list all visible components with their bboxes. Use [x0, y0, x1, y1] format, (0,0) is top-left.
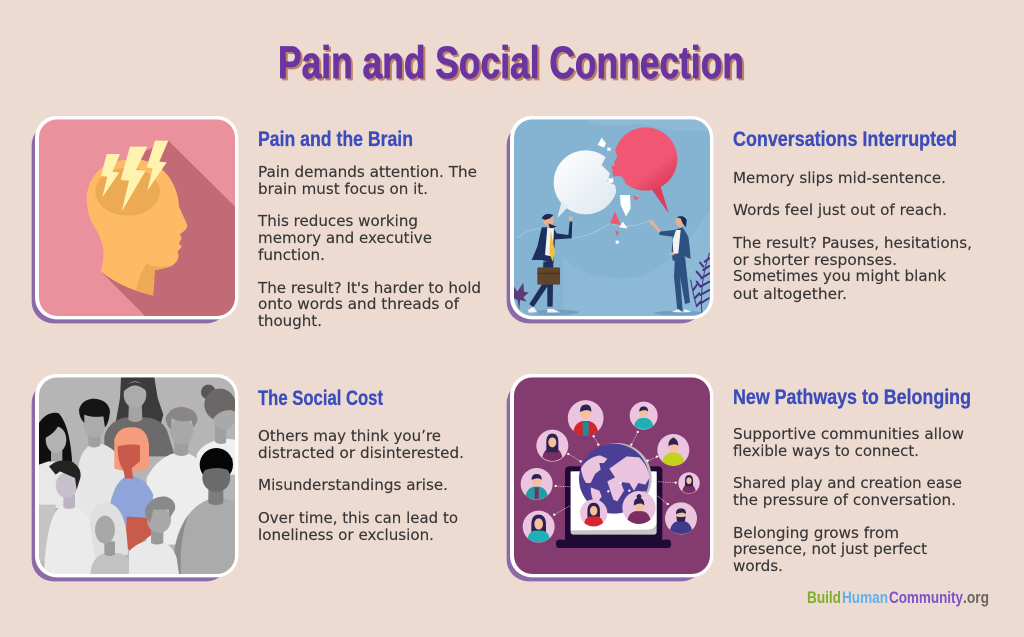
text block: pain and the brain: memory and executive	[258, 229, 432, 247]
icon: head silhouette	[87, 159, 187, 296]
text block: pain and the brain: The result? It's harder to hold	[257, 279, 481, 297]
text block: new pathways to belonging: the pressure of conversation.	[733, 491, 956, 509]
icon: people avatars	[521, 400, 700, 543]
text block: conversations interrupted: Conversations Interrupted	[733, 128, 957, 151]
text block: conversations interrupted: The result? Pauses, hesitations,	[732, 234, 972, 252]
panel: conversations interrupted illustration	[507, 116, 713, 323]
title: Pain and Social Connection	[280, 39, 746, 90]
text block: conversations interrupted	[732, 128, 972, 303]
panel: new pathways illustration	[507, 374, 713, 581]
footer logo: BuildHumanCommunity.org: .org	[963, 588, 989, 607]
icon: avatar small woman	[678, 472, 700, 494]
text block: the social cost: distracted or disinterested.	[258, 444, 464, 462]
icon: laptop	[556, 466, 671, 548]
icon: long shadow of head	[101, 141, 235, 316]
icon: woman gesturing	[648, 216, 702, 315]
text block: pain and the brain: thought.	[258, 312, 322, 330]
icon: woman at back	[104, 377, 175, 456]
icon: woman with long black hair	[39, 412, 78, 562]
icon: boy front centre	[129, 496, 179, 574]
text block: new pathways to belonging: New Pathways to Belonging	[733, 386, 971, 409]
icon: avatar purple woman with bun	[622, 491, 656, 524]
text block: the social cost: The Social Cost	[258, 387, 383, 410]
text block: new pathways to belonging: Supportive communities allow	[733, 425, 964, 443]
icon: person with hair bun	[197, 385, 236, 475]
icon: connection lines	[554, 432, 676, 515]
footer logo: BuildHumanCommunity.org	[807, 588, 989, 607]
text block: the social cost	[258, 387, 464, 544]
icon: globe	[579, 443, 652, 514]
icon: dark man front right	[174, 448, 235, 574]
icon: red speech bubble	[614, 127, 677, 213]
text block: the social cost: Over time, this can lead to	[258, 509, 458, 527]
text block: pain and the brain: Pain and the Brain	[258, 128, 413, 151]
icon: white speech bubble	[554, 150, 618, 218]
footer logo: BuildHumanCommunity.org: Build	[807, 588, 841, 607]
icon: blonde woman front	[90, 503, 129, 574]
icon: avatar red woman	[580, 499, 607, 527]
text block: new pathways to belonging: Shared play and creation ease	[733, 474, 962, 492]
icon: avatar lime shirt	[657, 434, 689, 466]
text block: new pathways to belonging: words.	[733, 557, 783, 575]
text block: new pathways to belonging: presence, not just perfect	[733, 540, 927, 558]
text block: conversations interrupted: out altogether.	[733, 285, 847, 303]
icon: avatar teal man	[630, 402, 658, 430]
footer logo: BuildHumanCommunity.org: Human	[842, 588, 888, 607]
text block: conversations interrupted: Memory slips mid-sentence.	[733, 169, 946, 187]
text block: conversations interrupted: Sometimes you might blank	[733, 267, 946, 285]
text block: the social cost: Others may think you’re	[258, 427, 441, 445]
icon: avatar teal jacket	[521, 468, 553, 500]
icon: connection nodes	[553, 431, 677, 516]
icon: avatar woman long hair	[536, 430, 568, 462]
icon: man with black quiff	[78, 398, 125, 522]
text block: pain and the brain: function.	[258, 246, 325, 264]
text block: pain and the brain	[257, 128, 481, 330]
icon: avatar man red shirt	[568, 400, 604, 436]
text block: the social cost: Misunderstandings arise.	[258, 476, 448, 494]
text block: pain and the brain: brain must focus on it.	[258, 180, 428, 198]
icon: neck shade	[136, 263, 172, 296]
icon: man with briefcase	[528, 214, 579, 315]
text block: conversations interrupted: or shorter responses.	[733, 251, 897, 269]
icon: bubble fragments	[598, 138, 639, 244]
icon: avatar bearded man	[665, 502, 697, 534]
icon: avatar teal woman	[523, 511, 555, 543]
text block: the social cost: loneliness or exclusion.	[258, 526, 434, 544]
icon: brain area	[95, 168, 160, 216]
text block: new pathways to belonging: Belonging grows from	[733, 524, 899, 542]
icon: man with grey hair	[147, 407, 213, 545]
footer logo: BuildHumanCommunity.org: Community	[889, 588, 963, 607]
text block: conversations interrupted: Words feel just out of reach.	[733, 201, 947, 219]
text block: pain and the brain: This reduces working	[257, 212, 418, 230]
panel: pain and the brain illustration	[32, 116, 238, 323]
icon: young man front left	[44, 460, 100, 574]
text block: new pathways to belonging: flexible ways to connect.	[733, 442, 919, 460]
text block: new pathways to belonging	[733, 386, 971, 575]
text block: pain and the brain: Pain demands attention. The	[258, 163, 477, 181]
title: Pain and Social Connection	[278, 37, 744, 88]
panel: the social cost illustration	[32, 374, 238, 581]
icon: purple plants	[514, 253, 709, 314]
icon: lightning bolts	[101, 141, 168, 212]
icon: highlighted woman in colour	[110, 427, 153, 551]
text block: pain and the brain: onto words and threads of	[258, 295, 460, 313]
